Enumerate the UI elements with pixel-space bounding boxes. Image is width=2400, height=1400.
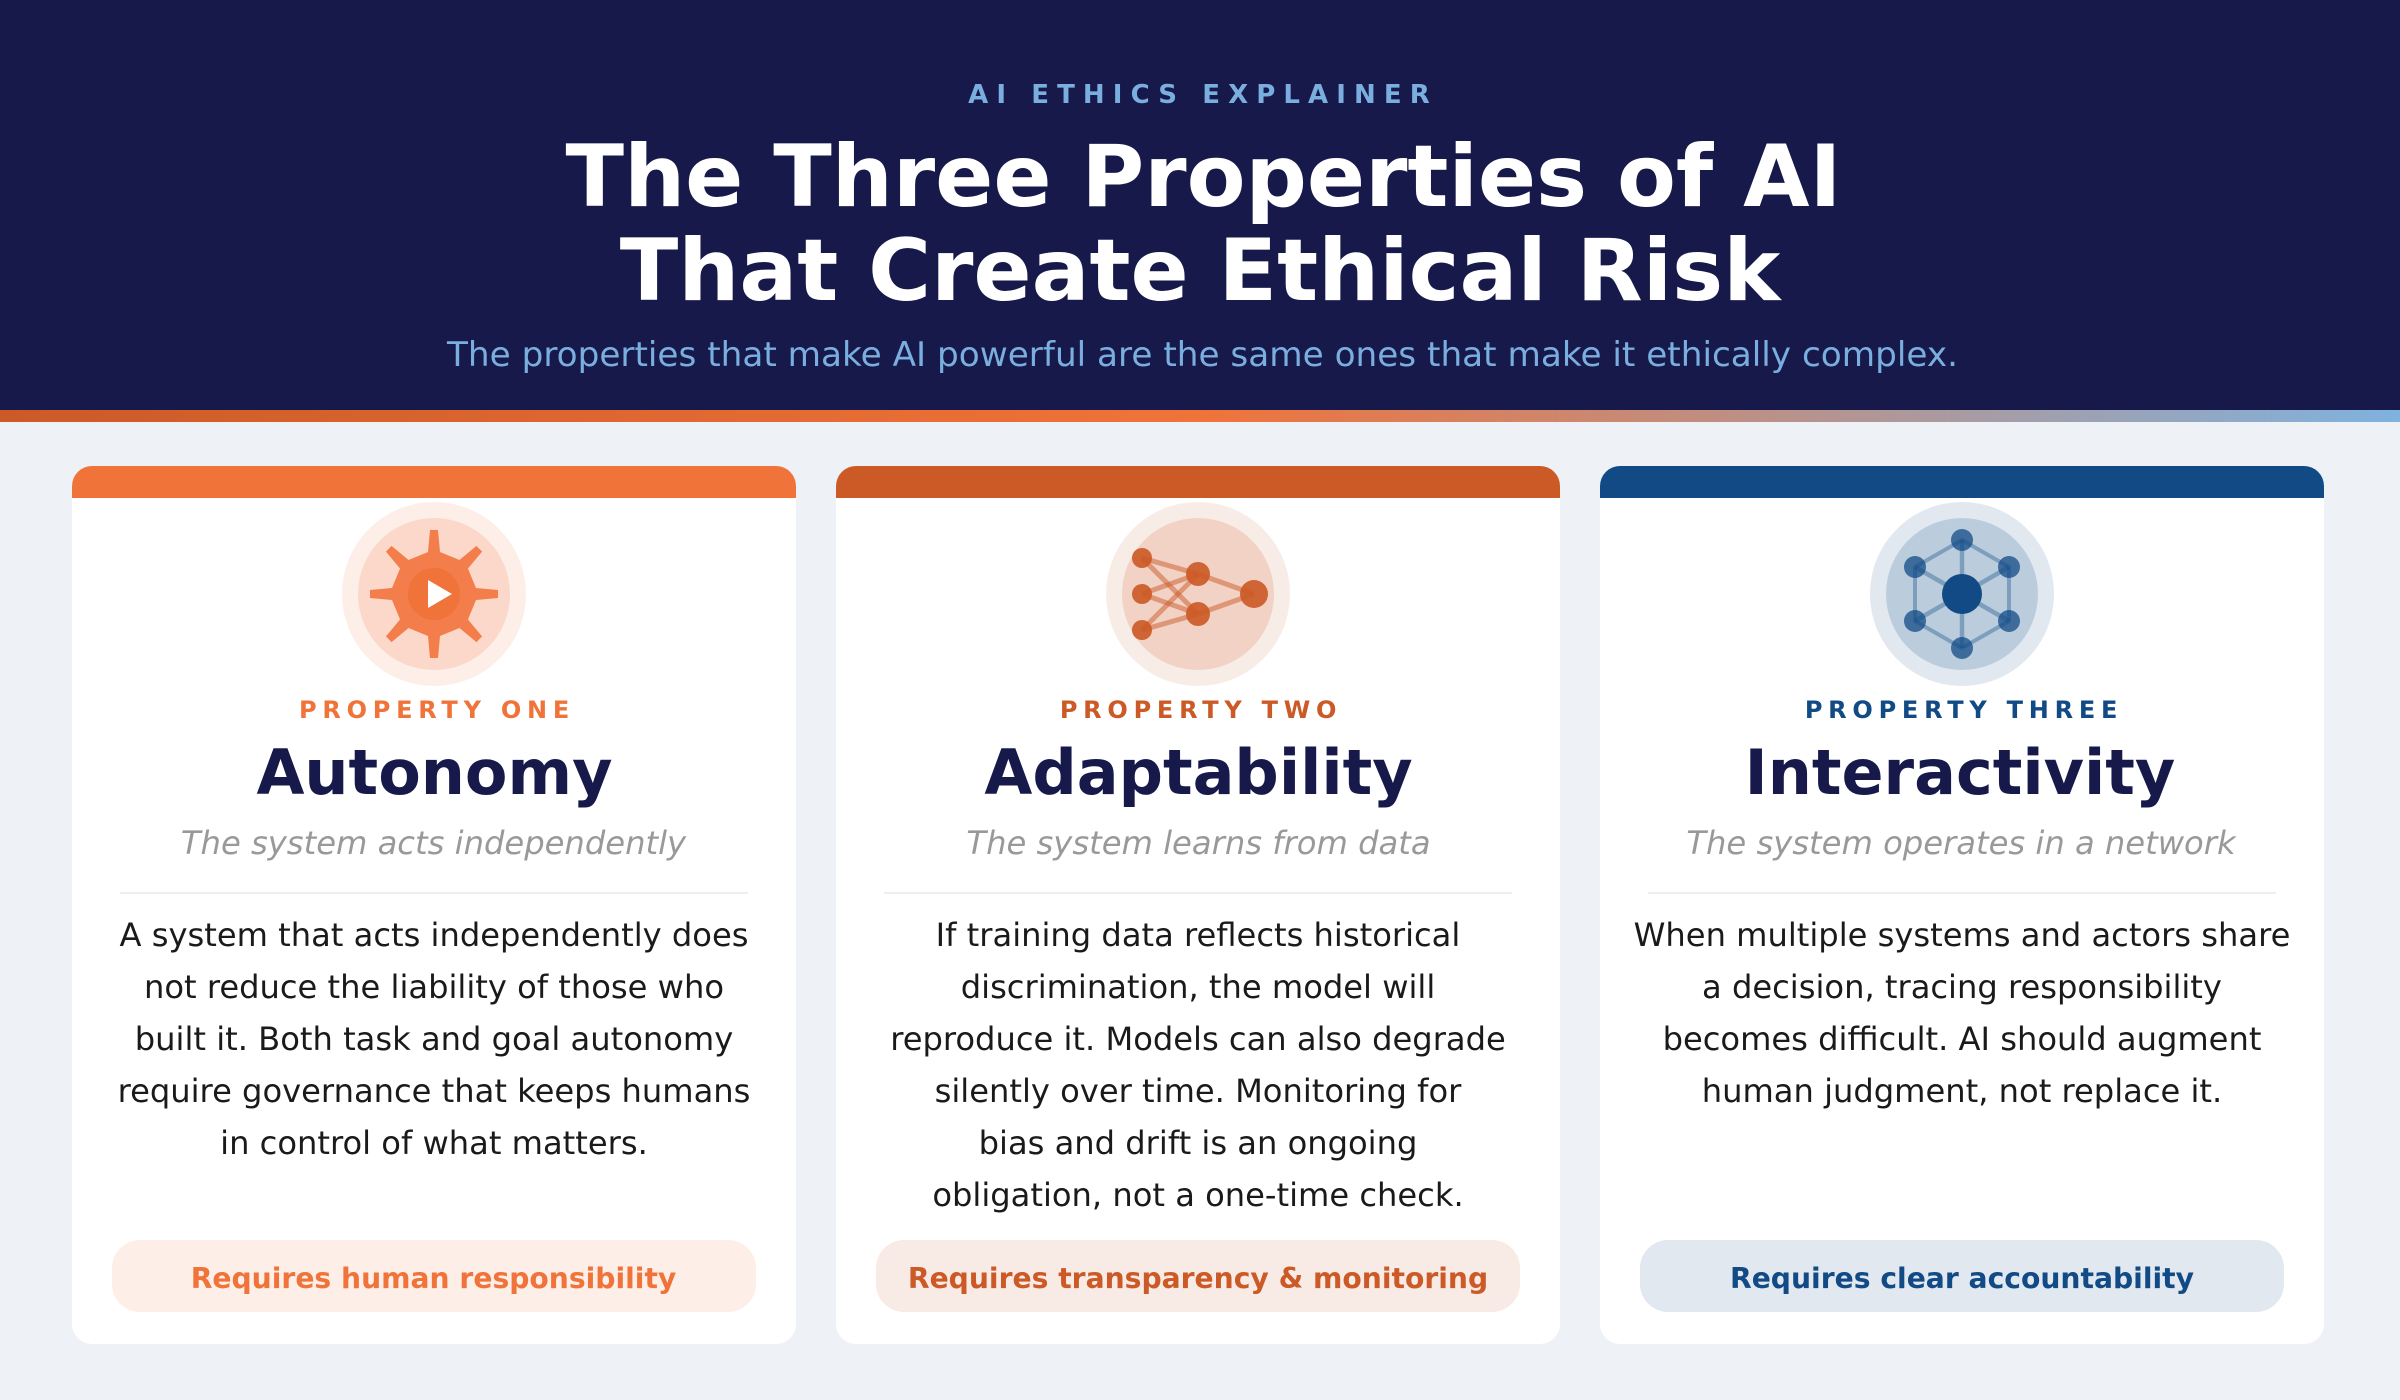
callout pill — [876, 1240, 1520, 1312]
body text — [890, 916, 1506, 1214]
title: That Create Ethical Risk — [620, 221, 1782, 321]
heading: adaptability: Adaptability — [984, 736, 1413, 809]
icon: network hub — [1870, 502, 2054, 686]
body text: If training data reflects historical — [936, 916, 1460, 954]
tagline: The system learns from data — [966, 824, 1431, 862]
gradient accent bar — [0, 410, 2400, 422]
body text: obligation, not a one-time check. — [932, 1176, 1464, 1214]
body text: bias and drift is an ongoing — [979, 1124, 1417, 1162]
title: The Three Properties of AI — [566, 127, 1841, 227]
label: property three: PROPERTY THREE — [1805, 696, 2123, 724]
body text: discrimination, the model will — [961, 968, 1435, 1006]
body text: built it. Both task and goal autonomy — [135, 1020, 733, 1058]
subtitle: The properties that make AI powerful are the same ones that make it ethically complex. — [446, 335, 1958, 375]
body text: silently over time. Monitoring for — [935, 1072, 1462, 1110]
card top band — [836, 466, 1560, 498]
body text: human judgment, not replace it. — [1702, 1072, 2222, 1110]
body text — [1634, 916, 2290, 1110]
body text: reproduce it. Models can also degrade — [890, 1020, 1506, 1058]
icon: gear with play symbol — [342, 502, 526, 686]
body text — [118, 916, 750, 1162]
header band — [0, 0, 2400, 410]
title — [566, 127, 1841, 321]
body text: in control of what matters. — [220, 1124, 648, 1162]
body text: A system that acts independently does — [120, 916, 748, 954]
callout pill: Requires transparency & monitoring — [908, 1262, 1488, 1295]
tagline: The system operates in a network — [1686, 824, 2237, 862]
tagline: The system acts independently — [181, 824, 687, 862]
callout pill: Requires human responsibility — [191, 1262, 676, 1295]
panel: adaptability — [836, 466, 1560, 1344]
body text: becomes difficult. AI should augment — [1663, 1020, 2261, 1058]
callout pill — [112, 1240, 756, 1312]
callout pill — [1640, 1240, 2284, 1312]
eyebrow: AI ETHICS EXPLAINER — [968, 80, 1438, 110]
card top band — [1600, 466, 2324, 498]
panel: autonomy — [72, 466, 796, 1344]
label: property one: PROPERTY ONE — [299, 696, 575, 724]
body text: require governance that keeps humans — [118, 1072, 750, 1110]
panel: interactivity — [1600, 466, 2324, 1344]
body text: When multiple systems and actors share — [1634, 916, 2290, 954]
label: property two: PROPERTY TWO — [1060, 696, 1342, 724]
callout pill: Requires clear accountability — [1730, 1262, 2194, 1295]
body text: not reduce the liability of those who — [144, 968, 724, 1006]
heading: autonomy: Autonomy — [256, 736, 613, 809]
card top band — [72, 466, 796, 498]
heading: interactivity: Interactivity — [1745, 736, 2175, 809]
icon: neural network — [1106, 502, 1290, 686]
body text: a decision, tracing responsibility — [1702, 968, 2222, 1006]
